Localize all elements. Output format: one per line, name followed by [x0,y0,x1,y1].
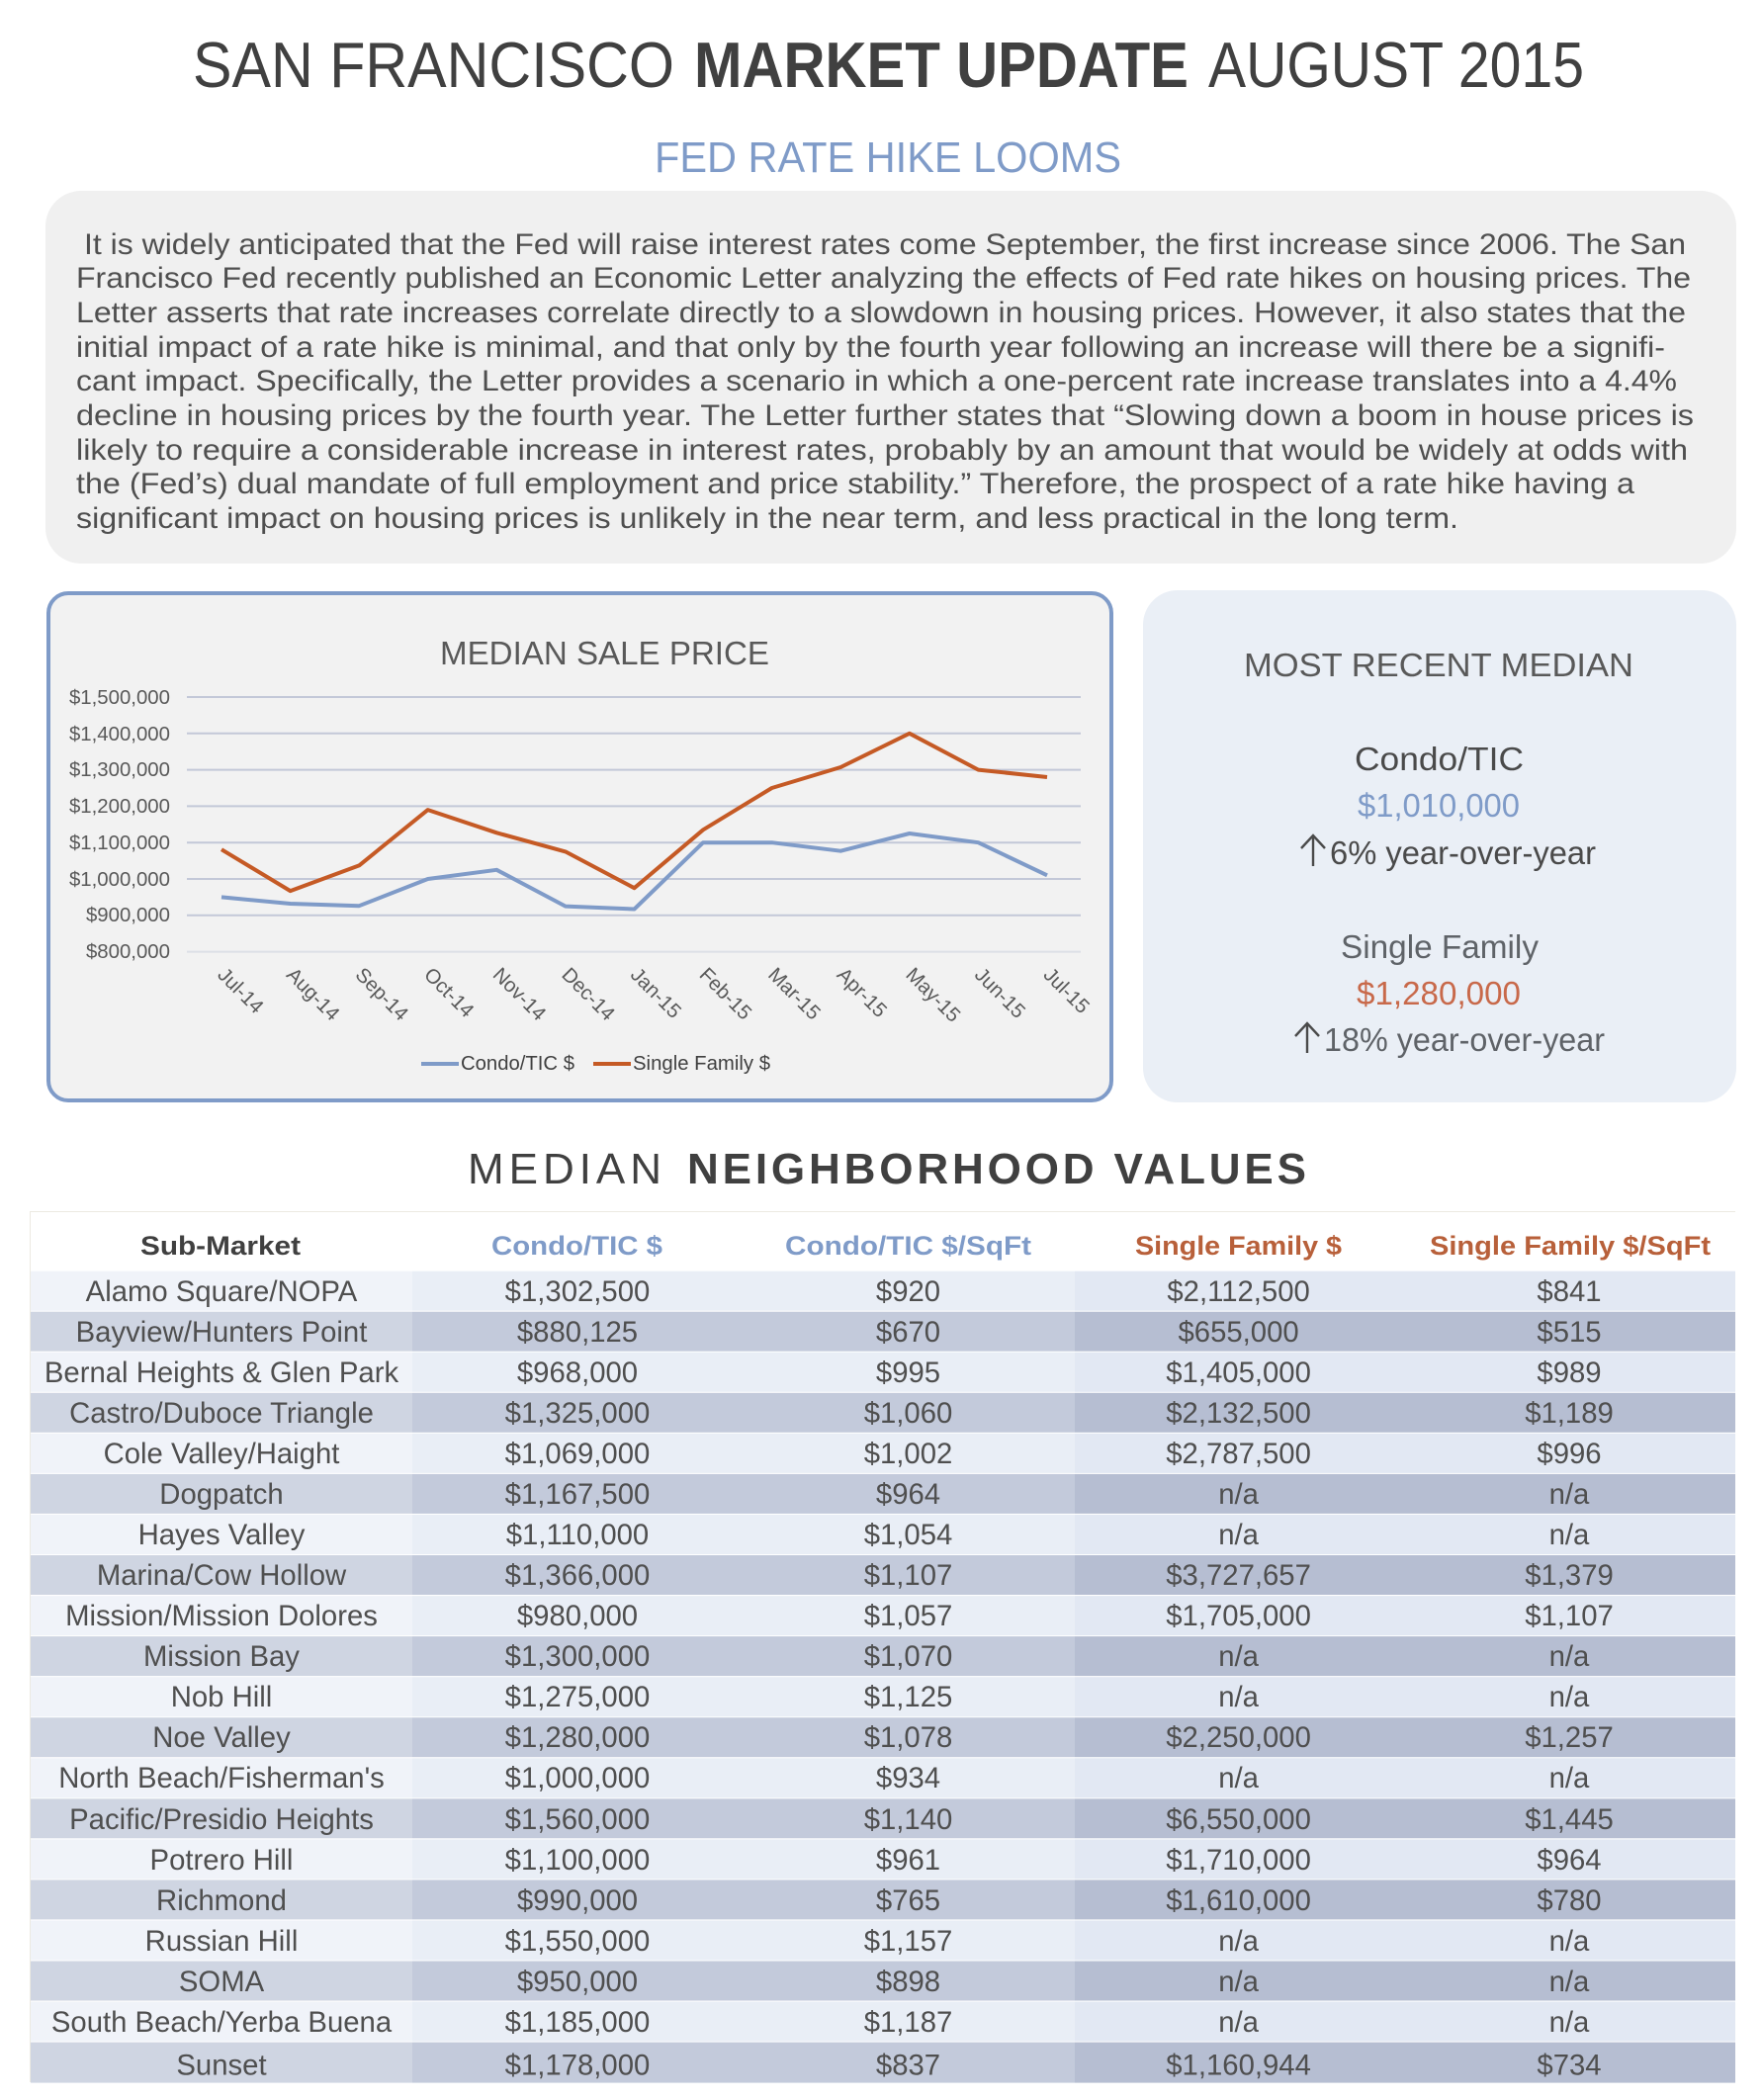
row: Mission/Mission Dolores: $980,000 [517,1600,638,1632]
title: AUGUST 2015 [1208,29,1584,101]
row: Bayview/Hunters Point: $515 [1537,1316,1602,1349]
row: Sunset: $734 [1537,2049,1602,2082]
row: Russian Hill: Russian Hill [145,1925,298,1958]
row: Dogpatch: Dogpatch [159,1478,284,1511]
y axis labels: $1,200,000 [69,796,170,818]
row: Bernal Heights & Glen Park [31,1353,1735,1392]
row: Marina/Cow Hollow: $1,379 [1525,1559,1614,1592]
panel: article text: cant impact. Specifically, the Letter provides a scenario in which a one-percent rate increase translates into a 4.4% [76,365,1677,397]
row: Bernal Heights & Glen Park: Bernal Heights & Glen Park [44,1356,398,1389]
y axis labels [69,687,170,963]
y axis labels: $800,000 [86,941,170,963]
condo/TIC stat: 6% year-over-year [1330,834,1596,871]
single family stat: Single Family [1341,928,1539,965]
row: SOMA: n/a [1549,1966,1590,1998]
single family stat: 18% year-over-year [1324,1021,1605,1058]
row: Richmond [31,1880,1735,1919]
x axis labels: Sep-14 [351,964,412,1025]
row: Potrero Hill: $1,100,000 [505,1844,650,1877]
row: Noe Valley: Noe Valley [152,1721,291,1754]
row: Bayview/Hunters Point: $670 [876,1316,940,1349]
row: Dogpatch: $1,167,500 [505,1478,650,1511]
table heading: MEDIAN [468,1145,661,1193]
row: Richmond: $990,000 [517,1884,638,1917]
row: Hayes Valley [31,1515,1735,1554]
table header: Single Family $ [1135,1231,1342,1261]
line: condo/TIC [221,833,1047,910]
row: Mission Bay: Mission Bay [143,1640,300,1673]
row: Nob Hill: $1,125 [864,1681,952,1713]
row: Pacific/Presidio Heights: $1,560,000 [505,1803,650,1836]
row: Noe Valley: $1,280,000 [505,1721,650,1754]
row: Bayview/Hunters Point: $880,125 [517,1316,638,1349]
row: Mission/Mission Dolores: $1,107 [1525,1600,1614,1632]
table header: Single Family $/SqFt [1430,1231,1711,1261]
row: Nob Hill: n/a [1549,1681,1590,1713]
row: Bernal Heights & Glen Park: $968,000 [517,1356,638,1389]
row: Bayview/Hunters Point [31,1312,1735,1352]
row: Russian Hill: n/a [1218,1925,1260,1958]
row: Mission/Mission Dolores: Mission/Mission Dolores [65,1600,378,1632]
y axis labels: $1,400,000 [69,724,170,745]
row: SOMA: SOMA [179,1966,265,1998]
legend [421,1053,770,1075]
row: Pacific/Presidio Heights: Pacific/Presidio Heights [69,1803,374,1836]
row: North Beach/Fisherman's: $1,000,000 [505,1762,650,1794]
x axis labels: Apr-15 [833,964,891,1022]
x axis labels: Dec-14 [557,964,619,1025]
row: Mission Bay: n/a [1549,1640,1590,1673]
x axis labels [213,964,1093,1027]
row: South Beach/Yerba Buena: $1,185,000 [505,2006,650,2039]
row: Sunset [31,2043,1735,2083]
panel: median sale price chart [48,593,1111,1100]
row: SOMA [31,1962,1735,2001]
line: single family [221,734,1047,891]
legend: Condo/TIC $ [461,1053,574,1075]
x axis labels: Jul-14 [213,964,267,1018]
row: South Beach/Yerba Buena: $1,187 [864,2006,952,2039]
legend: Single Family $ [633,1053,770,1075]
icon: up arrow [1295,1023,1319,1053]
row: Castro/Duboce Triangle: $1,189 [1525,1397,1614,1430]
row: South Beach/Yerba Buena: South Beach/Yerba Buena [51,2006,393,2039]
x axis labels: Nov-14 [488,964,550,1025]
row: Mission/Mission Dolores: $1,057 [864,1600,952,1632]
condo/TIC stat: $1,010,000 [1358,787,1520,824]
x axis labels: Oct-14 [419,964,478,1022]
panel heading: MOST RECENT MEDIAN [1244,647,1633,683]
x axis labels: Mar-15 [763,964,824,1024]
row: Pacific/Presidio Heights [31,1798,1735,1838]
row: Potrero Hill: $1,710,000 [1166,1844,1311,1877]
y axis labels: $1,000,000 [69,869,170,891]
row: Castro/Duboce Triangle: $1,325,000 [505,1397,650,1430]
row: Hayes Valley: n/a [1549,1519,1590,1551]
row: South Beach/Yerba Buena: n/a [1549,2006,1590,2039]
y axis labels: $1,500,000 [69,687,170,709]
row: Mission Bay: n/a [1218,1640,1260,1673]
row: North Beach/Fisherman's: North Beach/Fisherman's [58,1762,385,1794]
table header: Condo/TIC $ [491,1231,662,1261]
row: Marina/Cow Hollow: $1,366,000 [505,1559,650,1592]
title: SAN FRANCISCO [193,29,674,101]
row: Nob Hill: Nob Hill [171,1681,272,1713]
row: Castro/Duboce Triangle: $2,132,500 [1166,1397,1311,1430]
row: North Beach/Fisherman's: n/a [1218,1762,1260,1794]
x axis labels: Jul-15 [1039,964,1093,1018]
row: Marina/Cow Hollow: $1,107 [864,1559,952,1592]
row: Noe Valley [31,1717,1735,1757]
row: SOMA: $898 [876,1966,940,1998]
row: Cole Valley/Haight [31,1434,1735,1473]
row: Russian Hill: n/a [1549,1925,1590,1958]
row: Alamo Square/NOPA: Alamo Square/NOPA [86,1275,358,1308]
row: SOMA: $950,000 [517,1966,638,1998]
panel: article text: decline in housing prices by the fourth year. The Letter further states that “Slowing down a boom in house prices is [76,399,1694,432]
row: Hayes Valley: $1,110,000 [506,1519,649,1551]
row: Russian Hill: $1,550,000 [505,1925,650,1958]
row: Pacific/Presidio Heights: $6,550,000 [1166,1803,1311,1836]
row: Russian Hill [31,1920,1735,1960]
y axis labels: $900,000 [86,905,170,926]
row: Bernal Heights & Glen Park: $995 [876,1356,940,1389]
row: Richmond: $1,610,000 [1166,1884,1311,1917]
panel: article text: likely to require a considerable increase in interest rates, probably by an amount that would be widely at odds with [76,434,1688,467]
row: Sunset: Sunset [176,2049,267,2082]
row: Hayes Valley: $1,054 [864,1519,952,1551]
x axis labels: Jan-15 [626,964,685,1023]
row: South Beach/Yerba Buena: n/a [1218,2006,1260,2039]
row: Bayview/Hunters Point: Bayview/Hunters Point [76,1316,367,1349]
x axis labels: Feb-15 [695,964,755,1024]
icon: up arrow [1301,835,1325,866]
panel: article text: initial impact of a rate hike is minimal, and that only by the fourth year following an increase will there be a signifi- [76,331,1665,364]
row: North Beach/Fisherman's: $934 [876,1762,940,1794]
row: Cole Valley/Haight: $2,787,500 [1166,1438,1311,1470]
row: Nob Hill: $1,275,000 [505,1681,650,1713]
row: Richmond: $780 [1537,1884,1602,1917]
subtitle: FED RATE HIKE LOOMS [655,133,1121,182]
row: Cole Valley/Haight: Cole Valley/Haight [104,1438,339,1470]
row: SOMA: n/a [1218,1966,1260,1998]
panel: article text [45,191,1736,564]
condo/TIC stat: Condo/TIC [1355,741,1524,777]
panel: article text: the (Fed’s) dual mandate of full employment and price stability.” Therefore, the prospect of a rate hike having a [76,468,1634,500]
row: North Beach/Fisherman's [31,1758,1735,1797]
row: Castro/Duboce Triangle: $1,060 [864,1397,952,1430]
x axis labels: Jun-15 [970,964,1029,1023]
row: Richmond: Richmond [156,1884,287,1917]
row: Mission/Mission Dolores: $1,705,000 [1166,1600,1311,1632]
row: Bernal Heights & Glen Park: $989 [1537,1356,1602,1389]
row: Mission Bay: $1,300,000 [505,1640,650,1673]
row: Castro/Duboce Triangle: Castro/Duboce Triangle [69,1397,374,1430]
row: Mission Bay: $1,070 [864,1640,952,1673]
row: Noe Valley: $1,257 [1525,1721,1614,1754]
row: Dogpatch: n/a [1549,1478,1590,1511]
row: Mission/Mission Dolores [31,1596,1735,1635]
single family stat [1295,928,1605,1058]
row: Noe Valley: $1,078 [864,1721,952,1754]
row: Potrero Hill: Potrero Hill [150,1844,293,1877]
row: Cole Valley/Haight: $1,069,000 [505,1438,650,1470]
row: Alamo Square/NOPA [31,1271,1735,1311]
row: Nob Hill [31,1677,1735,1716]
row: Marina/Cow Hollow [31,1555,1735,1595]
panel: article text: Letter asserts that rate increases correlate directly to a slowdown in housing prices. However, it also states that the [76,297,1686,329]
row: Sunset: $1,178,000 [505,2049,650,2082]
panel: article text: Francisco Fed recently published an Economic Letter analyzing the effects of Fed rate hikes on housing prices. The [76,262,1691,295]
table header [140,1231,1711,1261]
row: North Beach/Fisherman's: n/a [1549,1762,1590,1794]
row: Pacific/Presidio Heights: $1,140 [864,1803,952,1836]
row: Alamo Square/NOPA: $841 [1537,1275,1602,1308]
title: MARKET UPDATE [694,29,1189,101]
row: Castro/Duboce Triangle [31,1393,1735,1433]
row: Dogpatch [31,1474,1735,1514]
row: Potrero Hill: $964 [1537,1844,1602,1877]
row: South Beach/Yerba Buena [31,2002,1735,2042]
table header: Condo/TIC $/SqFt [785,1231,1031,1261]
y axis labels: $1,100,000 [69,832,170,854]
title [193,29,1584,101]
row: Hayes Valley: Hayes Valley [138,1519,306,1551]
table: median neighborhood values [30,1212,1735,2083]
row: Sunset: $1,160,944 [1166,2049,1311,2082]
row: Mission Bay [31,1636,1735,1676]
row: Potrero Hill [31,1839,1735,1879]
table header: Sub-Market [140,1231,301,1261]
x axis labels: Aug-14 [282,964,343,1025]
panel: article text: It is widely anticipated that the Fed will raise interest rates come September, the first increase since 2006. The San [84,228,1686,261]
x axis labels: May-15 [901,964,964,1027]
row: Potrero Hill: $961 [876,1844,940,1877]
row: Dogpatch: $964 [876,1478,940,1511]
row: Alamo Square/NOPA: $1,302,500 [505,1275,650,1308]
row: Marina/Cow Hollow: $3,727,657 [1166,1559,1311,1592]
row: Bernal Heights & Glen Park: $1,405,000 [1166,1356,1311,1389]
row: Cole Valley/Haight: $996 [1537,1438,1602,1470]
row: Alamo Square/NOPA: $920 [876,1275,940,1308]
row: Hayes Valley: n/a [1218,1519,1260,1551]
row: Noe Valley: $2,250,000 [1166,1721,1311,1754]
row: Sunset: $837 [876,2049,940,2082]
row: Russian Hill: $1,157 [864,1925,952,1958]
single family stat: $1,280,000 [1357,975,1521,1011]
condo/TIC stat [1301,741,1596,871]
panel: most recent median [1143,590,1736,1102]
row: Nob Hill: n/a [1218,1681,1260,1713]
table heading: NEIGHBORHOOD VALUES [687,1145,1306,1193]
row: Cole Valley/Haight: $1,002 [864,1438,952,1470]
row: Marina/Cow Hollow: Marina/Cow Hollow [97,1559,347,1592]
row: Dogpatch: n/a [1218,1478,1260,1511]
row: Richmond: $765 [876,1884,940,1917]
y axis labels: $1,300,000 [69,759,170,781]
panel: article text: significant impact on housing prices is unlikely in the near term, and less practical in the long term. [76,502,1458,535]
row: Bayview/Hunters Point: $655,000 [1178,1316,1299,1349]
chart title: MEDIAN SALE PRICE [440,635,769,671]
row: Pacific/Presidio Heights: $1,445 [1525,1803,1614,1836]
row: Alamo Square/NOPA: $2,112,500 [1167,1275,1310,1308]
